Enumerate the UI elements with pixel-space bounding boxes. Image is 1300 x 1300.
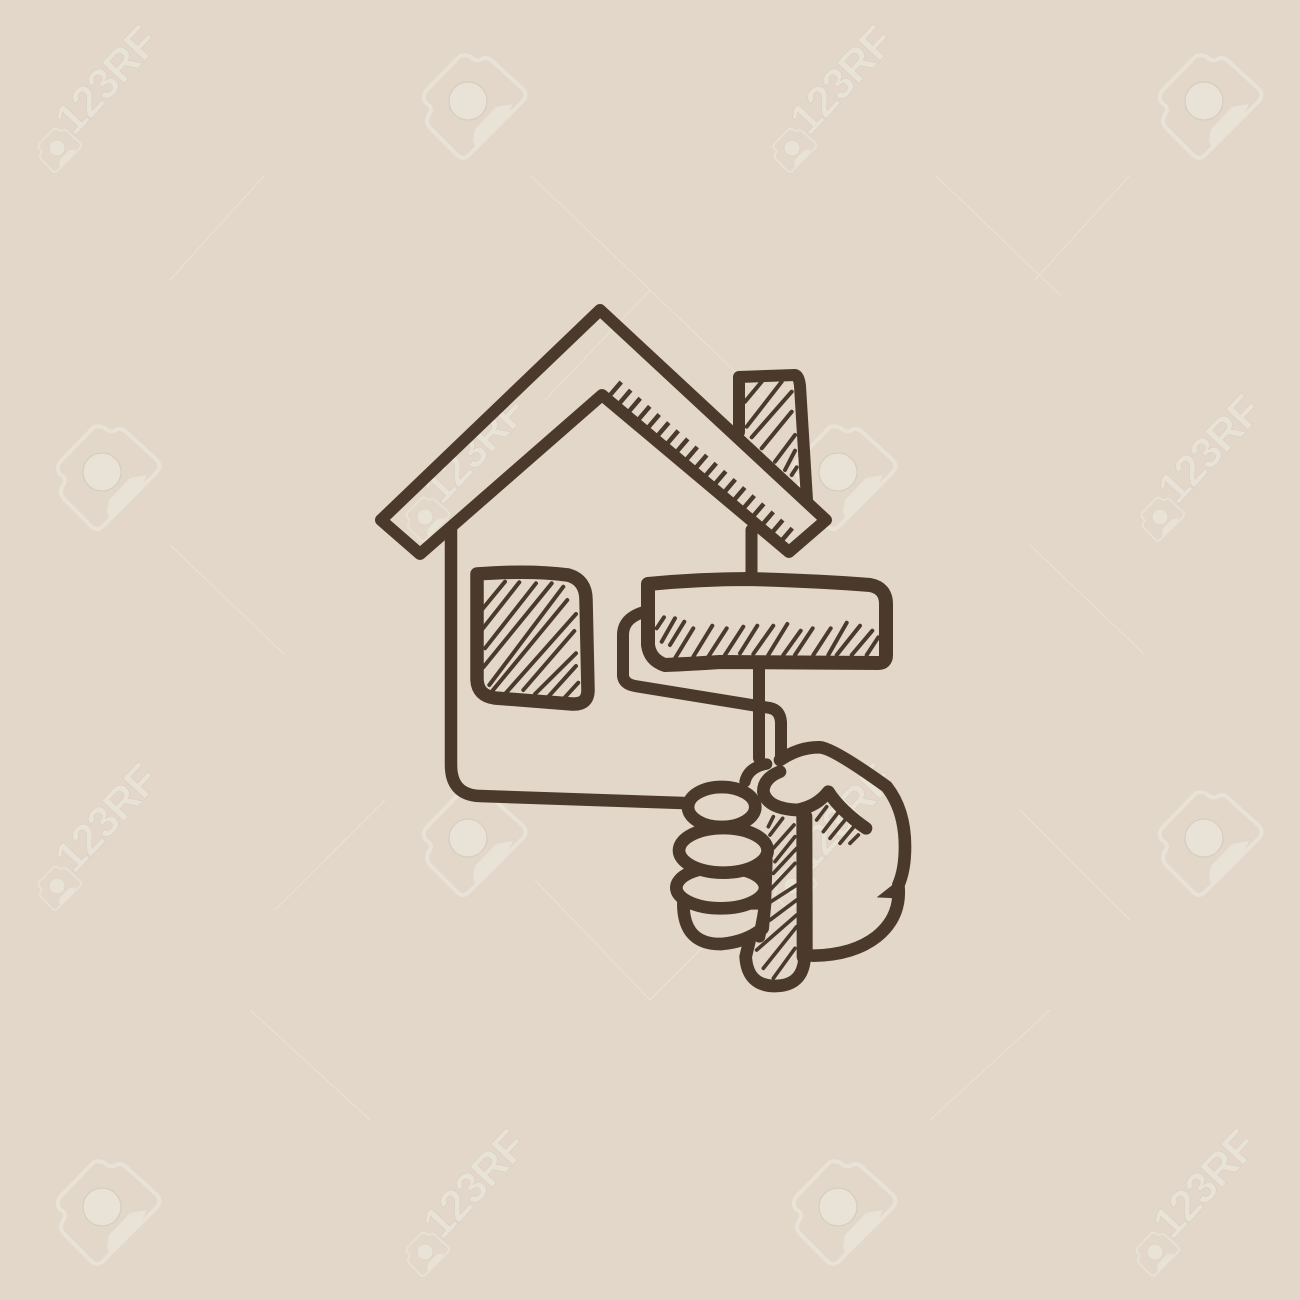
watermark: camera row 3 far right xyxy=(1160,792,1262,895)
watermark lines xyxy=(170,175,1145,1120)
hand holding roller xyxy=(676,747,905,986)
thumb xyxy=(763,772,866,828)
finger hook xyxy=(745,764,767,782)
roller frame xyxy=(623,612,781,758)
watermark: 123RF row 2 far right: 123RF xyxy=(1148,386,1271,513)
window xyxy=(477,572,588,704)
watermark: 123RF top right: 123RF xyxy=(780,17,903,144)
watermark: 123RF bottom far right: 123RF xyxy=(1143,1121,1266,1248)
second finger xyxy=(679,828,768,873)
palm notch xyxy=(877,882,905,898)
watermark: camera row 2 left xyxy=(58,426,160,529)
handle xyxy=(746,817,805,986)
house wall xyxy=(451,530,683,803)
paint roller head xyxy=(648,579,886,665)
watermark: 123RF row 3 left: 123RF xyxy=(45,755,168,882)
palm xyxy=(780,747,905,956)
icon: house with paint roller in hand xyxy=(381,310,905,986)
third finger xyxy=(676,867,765,908)
watermark: 123RF bottom centre: 123RF xyxy=(413,1121,536,1248)
finger edge against handle xyxy=(759,860,767,937)
wall stub above roller xyxy=(746,530,758,578)
little finger xyxy=(683,903,765,944)
first finger xyxy=(688,787,755,827)
watermark: camera row 2 right xyxy=(794,426,896,529)
watermark: 123RF top left: 123RF xyxy=(45,17,168,144)
watermark: camera bottom right xyxy=(794,1161,896,1264)
watermark: camera far top right xyxy=(1160,55,1262,158)
roof xyxy=(381,310,826,554)
chimney xyxy=(739,375,807,500)
thumb hatching xyxy=(817,807,858,843)
watermark: camera bottom left xyxy=(58,1161,160,1264)
watermark: camera top centre xyxy=(424,55,526,158)
watermark: 123RF row 3 right: 123RF xyxy=(780,755,903,882)
watermark: camera row 3 centre xyxy=(424,792,526,895)
watermark: 123RF row 2 centre: 123RF xyxy=(413,386,536,513)
